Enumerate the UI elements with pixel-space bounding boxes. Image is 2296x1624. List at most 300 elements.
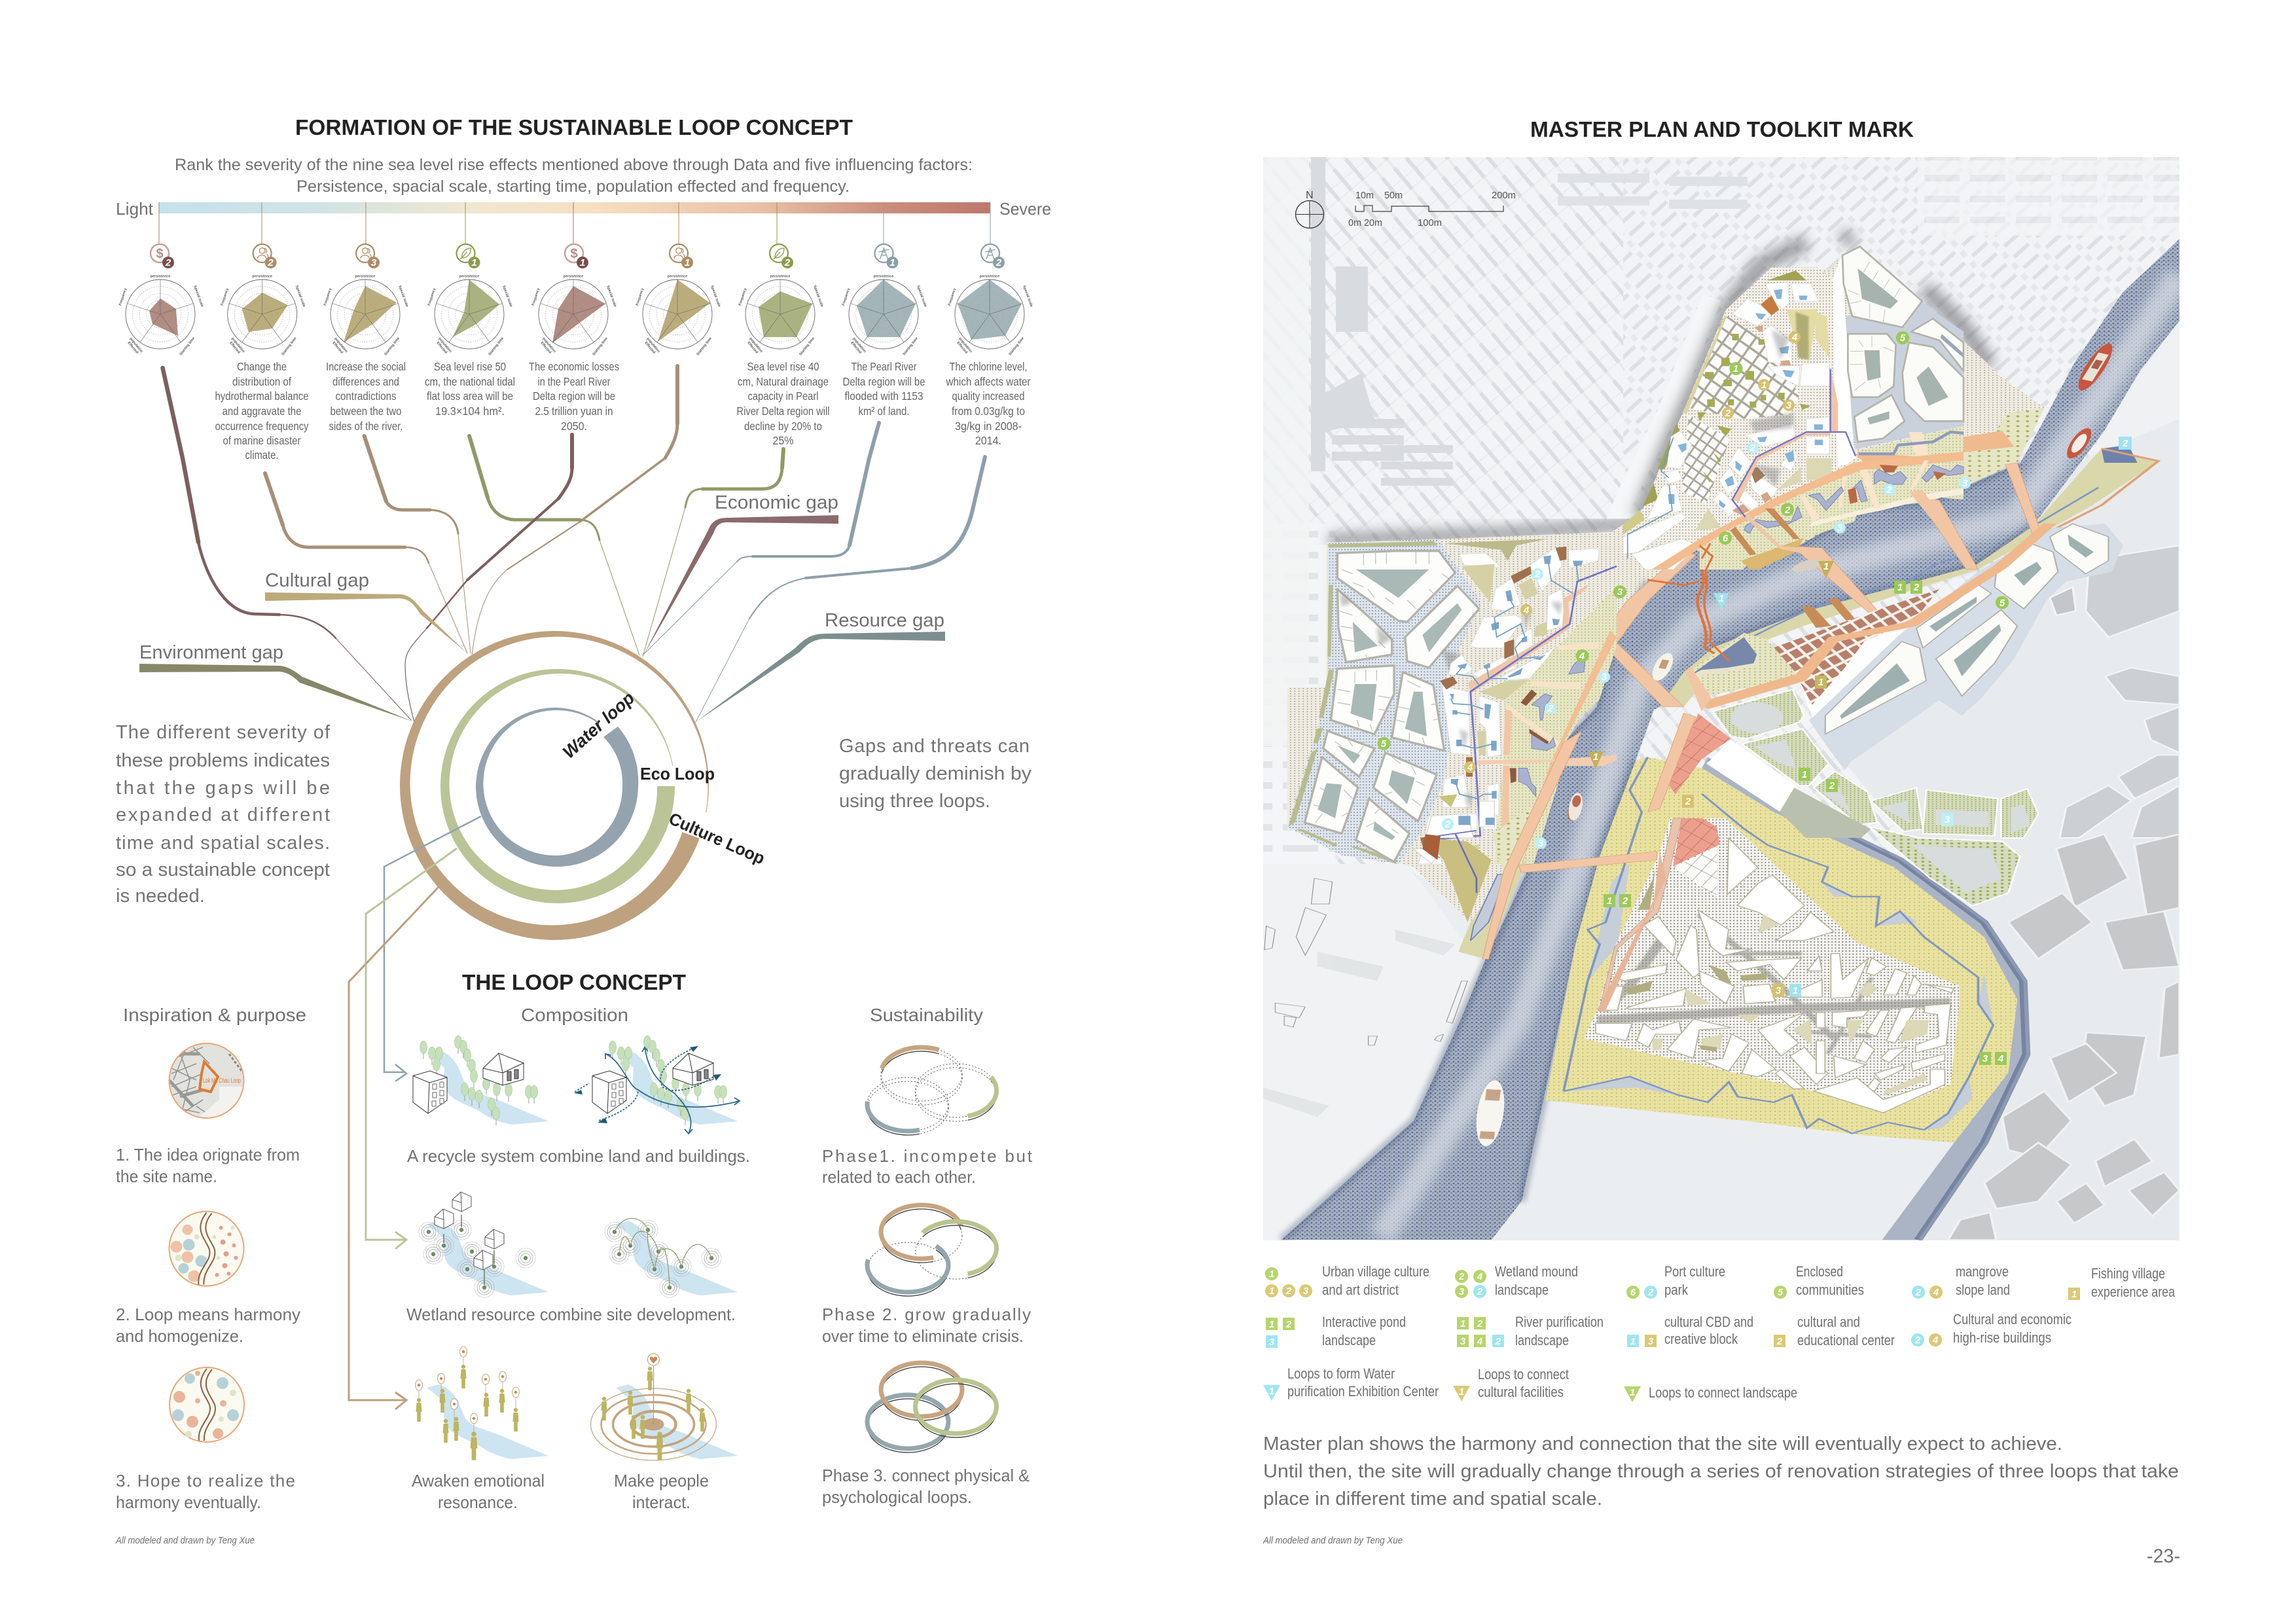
description: flooded land xyxy=(843,360,925,418)
icon: economic 2 xyxy=(151,244,174,268)
map markers xyxy=(1377,331,2132,1065)
label: culture loop: Culture Loop xyxy=(666,808,768,868)
loops west xyxy=(1468,585,1588,694)
legend item: high-rise buildings: high-rise buildings xyxy=(1953,1329,2051,1346)
legend item: river purification xyxy=(1457,1314,1604,1348)
gap label: resource gap: Resource gap xyxy=(825,610,944,631)
map markers: yellow circles: 4 xyxy=(1791,332,1798,343)
legend item: port culture park: 6 xyxy=(1630,1287,1636,1298)
heading: inspiration and purpose: Inspiration & purpose xyxy=(123,1005,306,1025)
icon: resource 1: 1 xyxy=(889,257,895,268)
map markers: square tags: 1 xyxy=(1818,677,1823,688)
map markers: yellow circles: 4 xyxy=(1467,762,1473,773)
legend item: cultural facilities loop: Loops to connect xyxy=(1478,1366,1569,1382)
left paragraph xyxy=(116,722,331,907)
legend item: wetland mound landscape: 2 xyxy=(1458,1271,1465,1282)
legend item: landscape loop xyxy=(1624,1384,1797,1402)
radar chart 5 xyxy=(531,275,617,356)
inspiration circle 1: site map: Lok Ma Chau Loop xyxy=(203,1077,241,1085)
legend item: river purification: 4 xyxy=(1477,1336,1483,1347)
radar chart 1 xyxy=(118,275,204,356)
icon: environment 1: 1 xyxy=(471,257,477,268)
description: chlorine level: from 0.03g/kg to xyxy=(952,405,1025,418)
legend item: fishing village: experience area xyxy=(2091,1284,2176,1300)
intro text block: Rank the severity of the nine sea level rise effects mentioned above through Data and five influencing factors: xyxy=(175,156,973,174)
map markers: green circles: 1 xyxy=(1733,363,1738,374)
composition illustration: wetland to development xyxy=(419,1192,548,1297)
radar chart 2 xyxy=(221,275,306,356)
map markers: square tags: 3 xyxy=(1776,985,1782,996)
north bank xyxy=(1700,425,1964,569)
icon: economic 1: 1 xyxy=(580,257,585,268)
severity scale bar: Severe xyxy=(999,199,1051,219)
description: chlorine level: quality increased xyxy=(952,389,1025,403)
legend item: river purification: River purification xyxy=(1515,1314,1604,1330)
description: drainage capacity: 25% xyxy=(772,434,793,447)
legend item: mangrove slope land: mangrove xyxy=(1956,1263,2009,1280)
map markers: square tags: 2 xyxy=(1622,895,1628,907)
legend item: cultural educational center: cultural and xyxy=(1797,1314,1860,1330)
icon: resource 2: 2 xyxy=(996,257,1002,268)
icon: environment 1 xyxy=(457,244,480,268)
inspiration captions xyxy=(116,1145,300,1512)
description: tidal flat loss: Sea level rise 50 xyxy=(434,360,506,373)
legend item: interactive pond: 1 xyxy=(1269,1319,1274,1330)
radar chart 7 xyxy=(738,275,824,356)
sustainability phase 1 rings xyxy=(867,1047,996,1135)
icon: culture 1 xyxy=(670,244,693,268)
icon: environment 2: 2 xyxy=(784,257,791,268)
right paragraph: gradually deminish by xyxy=(839,763,1032,784)
map markers: cyan circles: 2 xyxy=(1534,569,1541,580)
legend item: fishing village: 1 xyxy=(2072,1289,2077,1300)
description: hydrothermal: climate. xyxy=(245,448,279,461)
scale bar xyxy=(1348,190,1516,228)
ring: water loop xyxy=(476,708,638,867)
map markers: cyan circles: 3 xyxy=(1602,672,1607,683)
central west buildings and landscape xyxy=(1418,539,1617,864)
map markers: cyan circles: 3 xyxy=(1962,478,1968,489)
plaza buildings xyxy=(1623,283,1829,569)
left paragraph: The different severity of xyxy=(116,722,331,743)
radar chart 3 xyxy=(323,275,409,356)
composition captions 3: resonance. xyxy=(438,1492,518,1512)
composition illustration: emotional resonance xyxy=(415,1346,548,1460)
village grid xyxy=(1689,316,1800,419)
map markers: cyan circles: 2 xyxy=(1444,819,1451,830)
description: hydrothermal: distribution of xyxy=(232,375,291,388)
description: hydrothermal: Change the xyxy=(237,360,287,373)
legend item: wetland mound landscape: landscape xyxy=(1495,1282,1549,1298)
ring: culture loop xyxy=(400,631,709,940)
icon: culture 3 xyxy=(356,244,380,268)
credit right: All modeled and drawn by Teng Xue xyxy=(1263,1535,1403,1546)
composition illustration: land and building xyxy=(413,1036,548,1125)
map markers: yellow circles: 2 xyxy=(1725,408,1731,419)
description: chlorine level: 2014. xyxy=(975,434,1001,447)
map markers: square tags: 3 xyxy=(1945,814,1950,825)
map markers: yellow circles: 4 xyxy=(1523,605,1530,616)
description: tidal flat loss: cm, the national tidal xyxy=(425,375,515,388)
legend item: landscape loop: 1 xyxy=(1630,1387,1635,1398)
north and west base land xyxy=(1326,253,2044,707)
legend item: river purification: 1 xyxy=(1460,1318,1465,1329)
title: master plan and toolkit mark: MASTER PLAN AND TOOLKIT MARK xyxy=(1530,117,1914,141)
south west bank and south bridges xyxy=(1414,713,1696,1147)
inspiration circle 3: realized harmony xyxy=(170,1367,244,1442)
description: economic losses: 2050. xyxy=(561,420,587,433)
aerial city background xyxy=(1263,157,2179,877)
gap label: economic gap: Economic gap xyxy=(715,492,838,513)
lake and salt ponds xyxy=(1820,419,2179,1240)
bank bands and cross paths xyxy=(1505,641,1599,746)
north arrow xyxy=(1295,190,1324,228)
left paragraph: that the gaps will be xyxy=(116,778,330,799)
park and bay xyxy=(1685,633,1799,696)
scale bar: 100m xyxy=(1418,217,1442,228)
scale bar: 0m 20m xyxy=(1348,217,1382,228)
description: drainage capacity xyxy=(737,360,830,447)
heading: the loop concept: THE LOOP CONCEPT xyxy=(462,970,686,994)
legend item: wetland mound landscape: 4 xyxy=(1477,1271,1483,1282)
scale bar: 50m xyxy=(1384,190,1403,201)
legend item: enclosed communities: Enclosed xyxy=(1796,1263,1843,1280)
icon: economic 2: 2 xyxy=(165,257,171,268)
description: drainage capacity: cm, Natural drainage xyxy=(738,375,829,388)
left paragraph: so a sustainable concept xyxy=(116,859,330,880)
sustainability captions: related to each other. xyxy=(822,1167,976,1187)
legend item: fishing village xyxy=(2068,1265,2176,1300)
description: flooded land: km² of land. xyxy=(859,405,910,418)
legend xyxy=(1263,1263,2176,1402)
legend item: wetland mound landscape: 2 xyxy=(1477,1286,1483,1297)
legend item: river purification: 2 xyxy=(1477,1318,1483,1329)
page number: -23- xyxy=(2147,1545,2180,1567)
map markers: cyan circles: 3 xyxy=(1538,838,1544,849)
severity scale bar: Light xyxy=(116,199,154,219)
legend item: water purification loop xyxy=(1263,1365,1439,1401)
master plan paragraph: Until then, the site will gradually change through a series of renovation strategies of three loops that take xyxy=(1263,1461,2179,1482)
radar chart 6 xyxy=(636,275,721,356)
map markers: green circles: 5 xyxy=(2000,598,2005,609)
peninsula urban blocks xyxy=(1584,818,1960,1113)
radar chart 4 xyxy=(427,275,513,356)
description: chlorine level: which affects water xyxy=(946,375,1031,388)
description: social differences: sides of the river. xyxy=(329,420,403,433)
description: tidal flat loss: 19.3×104 hm². xyxy=(435,405,505,418)
description: chlorine level: 3g/kg in 2008- xyxy=(955,420,1022,433)
icon: resource 1 xyxy=(874,244,898,268)
heading: composition: Composition xyxy=(521,1005,628,1025)
legend item: enclosed communities: 5 xyxy=(1778,1287,1784,1298)
gap label: cultural gap xyxy=(265,570,467,653)
scale bar: 10m xyxy=(1355,190,1374,201)
map markers: triangles xyxy=(1588,561,1834,769)
legend item: cultural educational center xyxy=(1774,1314,1895,1348)
map markers: yellow circles: 3 xyxy=(1786,400,1792,411)
legend item: river purification: 2 xyxy=(1495,1336,1501,1347)
connector: water loop arrow xyxy=(384,816,481,1081)
description: tidal flat loss xyxy=(425,360,515,418)
map markers: square tags: 1 xyxy=(1793,985,1798,996)
description: drainage capacity: capacity in Pearl xyxy=(747,389,818,403)
sustainability captions: Phase1. incompete but xyxy=(822,1146,1033,1166)
map markers: green circles: 6 xyxy=(1723,533,1729,544)
white shore and grids xyxy=(1669,713,1871,838)
legend item: port culture park: park xyxy=(1664,1282,1689,1298)
legend item: wetland mound landscape: Wetland mound xyxy=(1495,1263,1578,1280)
legend item: urban village culture: and art district xyxy=(1322,1282,1399,1298)
description: economic losses xyxy=(529,360,619,433)
radar charts row xyxy=(118,275,1033,356)
legend item: water purification loop: Loops to form Water xyxy=(1287,1365,1395,1382)
legend item: cultural cbd xyxy=(1627,1314,1753,1347)
intro text block: Persistence, spacial scale, starting time, population effected and frequency. xyxy=(296,177,850,196)
icon: culture 2 xyxy=(253,244,277,268)
legend item: mangrove slope land: 4 xyxy=(1933,1287,1939,1298)
legend item: fishing village: Fishing village xyxy=(2091,1265,2165,1282)
legend item: port culture park: 2 xyxy=(1647,1287,1654,1298)
legend item: cultural cbd: creative block xyxy=(1664,1331,1738,1347)
description: economic losses: Delta region will be xyxy=(533,389,615,403)
map markers: green circles xyxy=(1377,331,2009,750)
icon: economic 1: $ xyxy=(570,247,578,261)
map markers: square tags: 2 xyxy=(2122,438,2128,449)
legend item: wetland mound landscape: 3 xyxy=(1459,1286,1465,1297)
legend item: cultural facilities loop xyxy=(1453,1366,1569,1401)
description: drainage capacity: Sea level rise 40 xyxy=(747,360,819,373)
west residential district xyxy=(1287,539,1481,864)
map markers: square tags: 1 xyxy=(1607,895,1612,907)
legend item: urban village culture: Urban village culture xyxy=(1322,1263,1429,1280)
icon: culture 2: 2 xyxy=(267,257,274,268)
purple loop north xyxy=(1831,369,1838,432)
map markers: triangles: 1 xyxy=(1719,593,1724,604)
legend item: port culture park: Port culture xyxy=(1664,1263,1725,1280)
legend item: landscape loop: Loops to connect landscape xyxy=(1649,1384,1797,1401)
legend item: mangrove slope land: slope land xyxy=(1956,1282,2010,1298)
credit left: All modeled and drawn by Teng Xue xyxy=(115,1535,255,1546)
map markers: green circles: 5 xyxy=(1381,738,1387,749)
description: hydrothermal: and aggravate the xyxy=(223,405,301,418)
flow curves from problems to gaps xyxy=(162,366,985,722)
legend item: high-rise buildings xyxy=(1911,1311,2072,1346)
legend item: river purification: landscape xyxy=(1515,1332,1569,1348)
scale bar: 200m xyxy=(1492,190,1516,201)
composition captions 3: interact. xyxy=(632,1492,691,1512)
severity scale bar xyxy=(116,199,1051,244)
south peninsula xyxy=(1545,757,2017,1143)
map markers: cyan circles xyxy=(1442,442,1971,849)
legend item: interactive pond: 2 xyxy=(1285,1319,1292,1330)
sustainability phase 2 rings xyxy=(867,1205,996,1296)
mangrove slope land xyxy=(1713,689,2039,906)
left paragraph: expanded at different xyxy=(116,804,330,825)
site edge shadows and halo xyxy=(1329,234,1990,540)
master plan paragraph xyxy=(1263,1434,2179,1509)
connector: eco loop arrow xyxy=(366,848,457,1249)
legend item: urban village culture: 1 xyxy=(1269,1269,1274,1280)
description: flooded land: The Pearl River xyxy=(851,360,917,373)
icon: culture 1: 1 xyxy=(685,257,690,268)
severity icons row xyxy=(151,244,1005,268)
inspiration captions: 3. Hope to realize the xyxy=(116,1471,295,1490)
map markers: triangles: 1 xyxy=(1593,751,1598,763)
composition illustration: wetland network xyxy=(605,1218,738,1297)
outer bank strip xyxy=(1660,448,2159,707)
legend item: interactive pond: 3 xyxy=(1269,1337,1275,1348)
legend item: high-rise buildings: Cultural and economic xyxy=(1953,1311,2072,1327)
description: hydrothermal: of marine disaster xyxy=(223,434,301,447)
legend item: cultural cbd: cultural CBD and xyxy=(1664,1314,1753,1330)
legend item: wetland mound landscape xyxy=(1455,1263,1578,1298)
description: hydrothermal: occurrence frequency xyxy=(215,420,309,433)
description: hydrothermal xyxy=(215,360,309,461)
legend item: cultural facilities loop: cultural facilities xyxy=(1478,1384,1564,1400)
legend item: interactive pond: landscape xyxy=(1322,1332,1376,1348)
north-east and bank base, bridges across river xyxy=(1560,342,2159,707)
radar chart 9 xyxy=(948,275,1033,356)
ring: eco loop xyxy=(440,669,675,903)
icon: economic 2: $ xyxy=(156,247,164,261)
description: drainage capacity: River Delta region will xyxy=(737,405,830,418)
map markers: square tags: 3 xyxy=(1982,1053,1988,1064)
composition illustration: people interact xyxy=(590,1354,738,1460)
legend item: cultural cbd: 1 xyxy=(1630,1336,1636,1347)
description: economic losses: 2.5 trillion yuan in xyxy=(535,405,613,418)
label: water loop: Water loop xyxy=(559,688,638,762)
description: flooded land: Delta region will be xyxy=(843,375,925,388)
description: tidal flat loss: flat loss area will be xyxy=(427,389,513,403)
description: social differences: differences and xyxy=(332,375,399,388)
inspiration captions: and homogenize. xyxy=(116,1326,243,1346)
inspiration circle 1: site map xyxy=(169,1041,243,1119)
description: chlorine level: The chlorine level, xyxy=(949,360,1028,373)
gap label: environment gap xyxy=(139,642,414,722)
icon: environment 2 xyxy=(770,244,793,268)
left paragraph: these problems indicates xyxy=(116,750,330,771)
map markers: triangles: 1 xyxy=(1823,561,1829,572)
inspiration captions: 1. The idea orignate from xyxy=(116,1145,300,1164)
description: social differences: contradictions xyxy=(335,389,397,403)
heading: sustainability: Sustainability xyxy=(870,1005,983,1025)
east channel xyxy=(1702,757,2026,1240)
composition caption 2: Wetland resource combine site development. xyxy=(406,1305,736,1324)
legend item: water purification loop: purification Exhibition Center xyxy=(1287,1383,1439,1399)
north arrow: N xyxy=(1306,190,1314,201)
description: hydrothermal: hydrothermal balance xyxy=(215,389,309,403)
composition captions 3: Make people xyxy=(614,1471,709,1490)
map markers: square tags: 1 xyxy=(1802,769,1807,780)
description: economic losses: The economic losses xyxy=(529,360,619,373)
legend item: interactive pond: Interactive pond xyxy=(1322,1314,1406,1330)
north residential and village xyxy=(1623,247,1964,569)
master plan paragraph: Master plan shows the harmony and connection that the site will eventually expect to achieve. xyxy=(1263,1434,2062,1454)
map markers: yellow circles xyxy=(1464,331,1801,773)
inspiration captions: the site name. xyxy=(116,1166,217,1186)
label: eco loop: Eco Loop xyxy=(640,764,715,784)
inspiration captions: 2. Loop means harmony xyxy=(116,1305,300,1324)
map markers: square tags xyxy=(1604,437,2132,1065)
sustainability phase 3 rings xyxy=(867,1363,996,1453)
master plan map xyxy=(1263,157,2179,1240)
orange main band xyxy=(1698,524,2056,709)
connector: culture loop arrow xyxy=(349,886,439,1409)
right paragraph xyxy=(839,736,1032,812)
composition captions 3 xyxy=(412,1471,709,1512)
intro text block xyxy=(175,156,973,196)
legend item: enclosed communities: communities xyxy=(1796,1282,1864,1298)
sustainability captions: Phase 3. connect physical & xyxy=(822,1466,1030,1485)
map markers: square tags: 2 xyxy=(1685,796,1691,807)
composition illustration: recycle arrows xyxy=(574,1036,740,1134)
description: drainage capacity: decline by 20% to xyxy=(744,420,822,433)
map markers: green circles: 2 xyxy=(1784,505,1791,516)
map markers: square tags: 2 xyxy=(1913,582,1920,593)
map markers: square tags: 4 xyxy=(1998,1053,2004,1064)
right paragraph: Gaps and threats can xyxy=(839,736,1030,757)
legend item: cultural educational center: educational center xyxy=(1797,1332,1895,1348)
description: social differences xyxy=(326,360,406,433)
left paragraph: time and spatial scales. xyxy=(116,833,330,854)
radar chart 8 xyxy=(842,275,927,356)
description: social differences: Increase the social xyxy=(326,360,406,373)
map markers: square tags: 1 xyxy=(1897,582,1903,593)
legend item: enclosed communities xyxy=(1774,1263,1864,1299)
legend item: urban village culture: 2 xyxy=(1285,1286,1292,1297)
map markers: cyan circles: 2 xyxy=(1886,484,1892,496)
legend item: urban village culture: 1 xyxy=(1269,1286,1274,1297)
icon: economic 1 xyxy=(565,244,588,268)
legend item: water purification loop: 1 xyxy=(1269,1386,1274,1397)
inspiration captions: harmony eventually. xyxy=(116,1492,261,1512)
lower left pale ground xyxy=(1265,864,1416,877)
description: social differences: between the two xyxy=(330,405,402,418)
gap label: cultural gap: Cultural gap xyxy=(265,570,369,591)
map markers: cyan circles: 3 xyxy=(1837,522,1843,533)
description: flooded land: flooded with 1153 xyxy=(844,389,923,403)
map markers: cyan circles: 2 xyxy=(1547,703,1554,714)
legend item: high-rise buildings: 4 xyxy=(1932,1335,1939,1346)
master plan paragraph: place in different time and spatial scale. xyxy=(1263,1489,1602,1509)
legend item: cultural facilities loop: 1 xyxy=(1459,1386,1464,1398)
legend item: mangrove slope land: 2 xyxy=(1915,1287,1922,1298)
composition captions 3: Awaken emotional xyxy=(412,1471,545,1490)
sustainability captions xyxy=(822,1146,1033,1507)
legend item: interactive pond xyxy=(1266,1314,1406,1348)
map markers: green circles: 4 xyxy=(1579,651,1585,662)
legend item: urban village culture xyxy=(1265,1263,1429,1298)
map markers: green circles: 3 xyxy=(1617,586,1623,598)
map markers: green circles: 5 xyxy=(1900,333,1906,344)
gap label: resource gap xyxy=(696,610,945,722)
description: economic losses: in the Pearl River xyxy=(538,375,611,388)
ships on the river xyxy=(2072,342,2119,392)
legend item: port culture park xyxy=(1626,1263,1725,1299)
icon: resource 2 xyxy=(981,244,1005,268)
sustainability captions: Phase 2. grow gradually xyxy=(822,1305,1031,1324)
river main xyxy=(1282,239,2179,1240)
icon: culture 3: 3 xyxy=(371,257,377,268)
right paragraph: using three loops. xyxy=(839,791,990,812)
legend item: urban village culture: 3 xyxy=(1303,1286,1309,1297)
sustainability captions: psychological loops. xyxy=(822,1487,972,1507)
legend item: mangrove slope land xyxy=(1912,1263,2010,1299)
sustainability captions: over time to eliminate crisis. xyxy=(822,1326,1024,1346)
gap label: environment gap: Environment gap xyxy=(139,642,283,663)
map markers: cyan circles: 2 xyxy=(1749,442,1756,454)
legend item: high-rise buildings: 2 xyxy=(1914,1335,1921,1346)
